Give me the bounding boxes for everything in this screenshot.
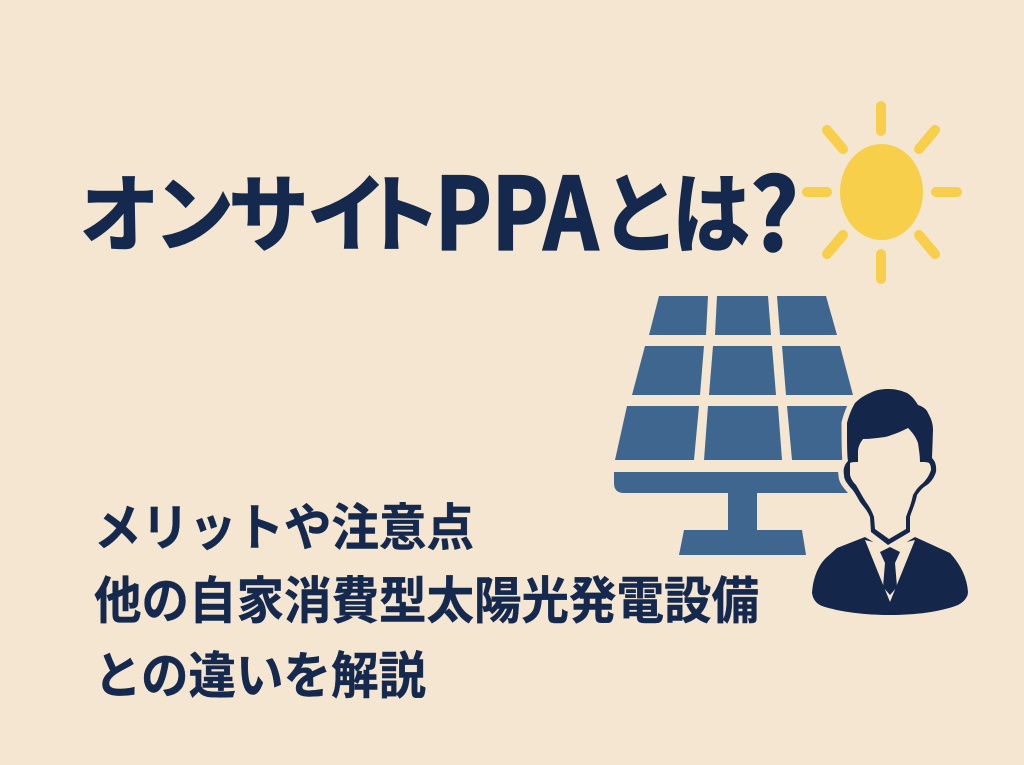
title: ト: [361, 148, 441, 270]
subtitle line 3: との違いを解説: [94, 635, 426, 708]
title: PPA: [435, 135, 598, 279]
title: ?: [750, 136, 799, 280]
title: [80, 135, 799, 280]
icon: businessman: [812, 389, 968, 615]
title: イ: [307, 148, 387, 270]
icon: solar panel: [614, 296, 870, 555]
title: オンサ: [80, 148, 303, 270]
icon: sun: [807, 106, 957, 279]
subtitle text block: [94, 487, 759, 708]
subtitle line 2: 他の自家消費型太陽光発電設備: [94, 560, 759, 633]
subtitle line 1: メリットや注意点: [94, 487, 474, 560]
title: とは: [601, 146, 743, 271]
